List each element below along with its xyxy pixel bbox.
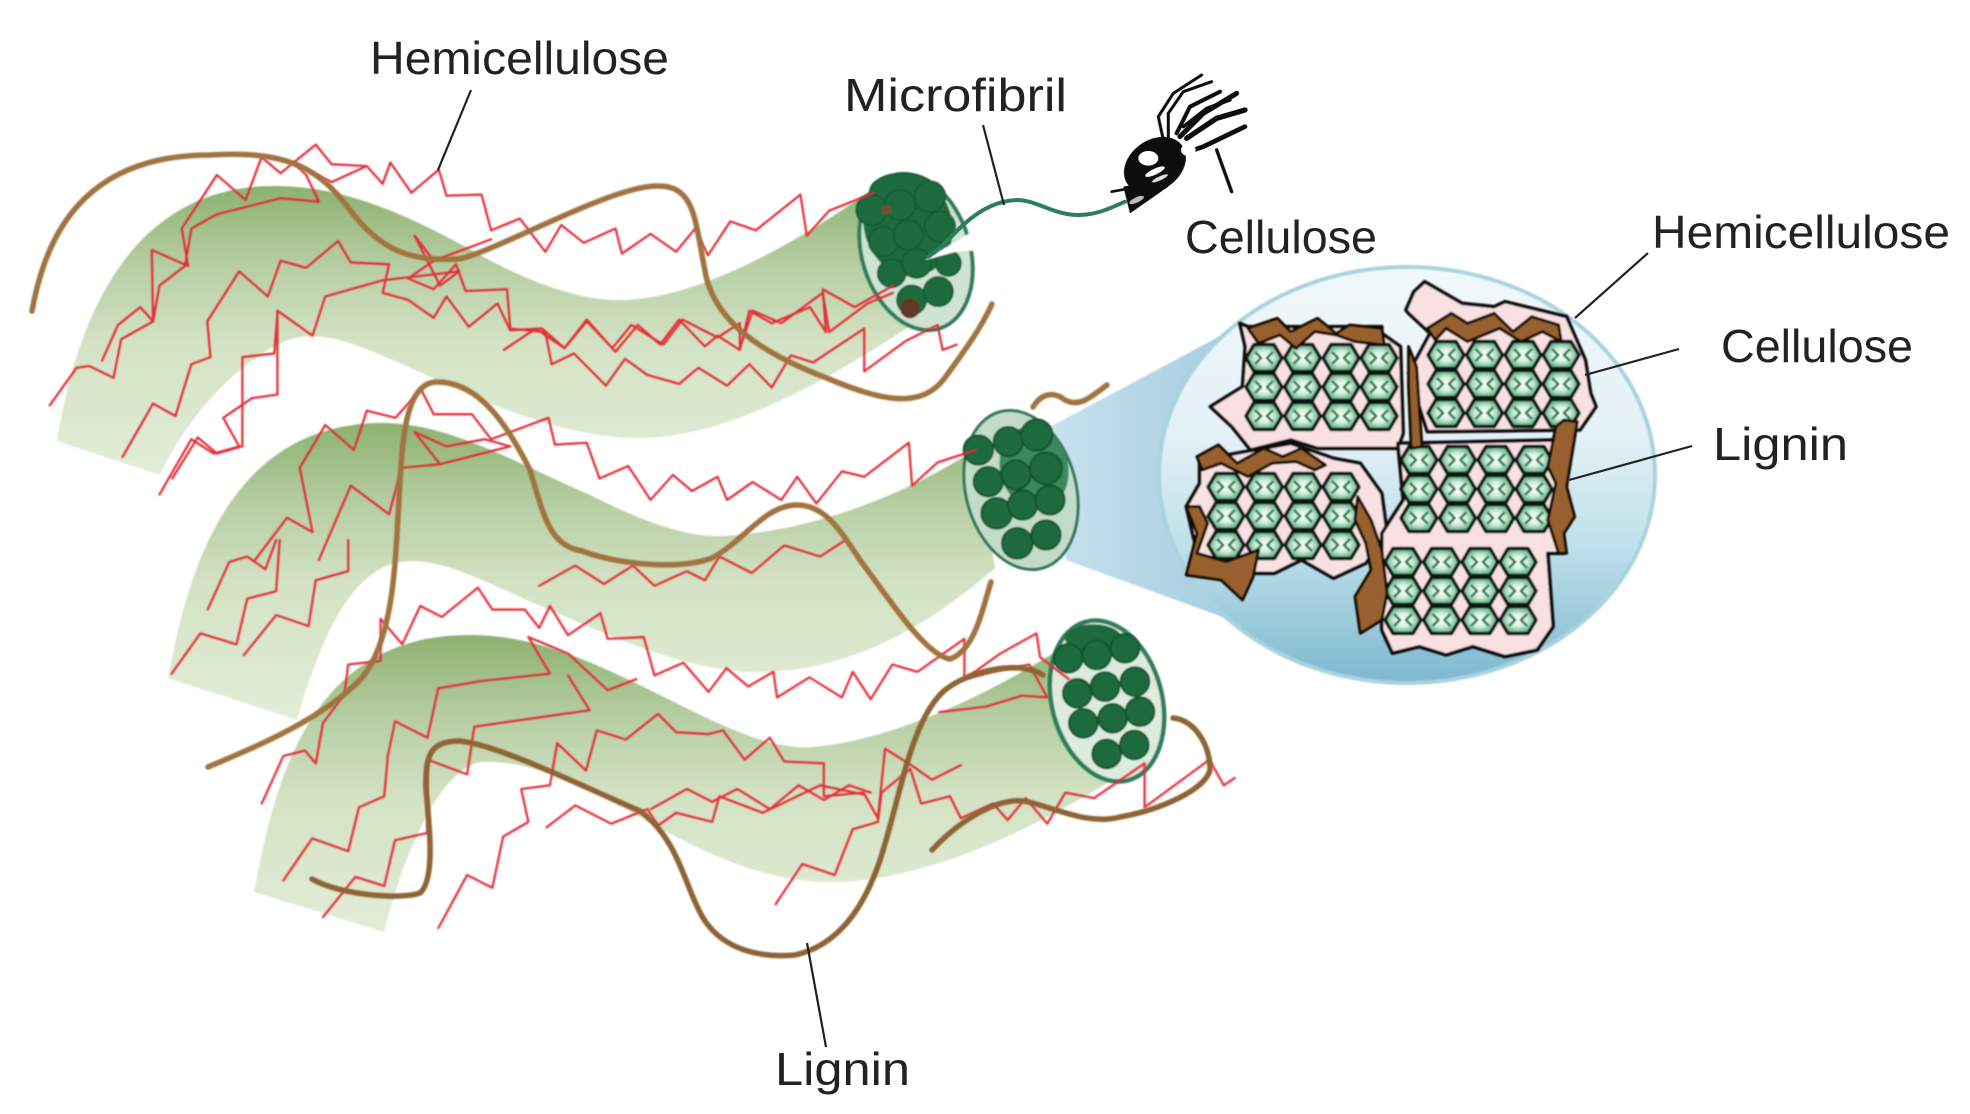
cross section: cellulose blocks in lignin and hemicellulose [1186, 282, 1596, 657]
leader: hemicellulose right [1575, 253, 1648, 318]
label: Microfibril: Microfibril [844, 69, 1067, 121]
magnified circle [1159, 267, 1655, 683]
red chains on middle fibre [255, 389, 976, 560]
block A background [1210, 323, 1403, 450]
lignin strand 2 [208, 382, 991, 767]
lignin brown fragments [1186, 313, 1577, 633]
cellulose hexagons, block B [1428, 342, 1579, 426]
fibre ribbon 2 [168, 423, 995, 720]
lignin strand 1 [32, 154, 992, 399]
icon: cellulose fibre bundle [1112, 75, 1245, 213]
lignin strand 3 [312, 668, 1043, 956]
lignin strand 5 [1033, 385, 1107, 407]
label: Cellulose top: Cellulose [1185, 211, 1377, 263]
leader: lignin bottom [807, 943, 826, 1047]
label: Cellulose right: Cellulose [1721, 320, 1913, 372]
fibre ribbon 1 [57, 186, 918, 475]
cellulose hexagons, block D [1401, 446, 1552, 532]
fibre end 1 with microfibril bundle [841, 160, 991, 344]
lignin brown strands [32, 154, 1210, 956]
fibre ribbon 3 [254, 635, 1122, 932]
leader lines [438, 90, 1692, 1047]
label: Hemicellulose right: Hemicellulose [1652, 206, 1950, 258]
label: Lignin bottom: Lignin [775, 1043, 910, 1095]
leader: lignin right [1569, 446, 1692, 480]
microfibril strand [928, 200, 1125, 257]
cellulose hexagons, block C [1208, 474, 1359, 558]
block D and E background [1382, 440, 1564, 657]
fibre end 3 [1033, 608, 1181, 794]
cellulose hexagons, block A [1246, 344, 1397, 430]
label: Lignin right: Lignin [1713, 418, 1848, 470]
cellulose hexagons, block E [1385, 548, 1536, 634]
fibre end 2 [947, 398, 1095, 582]
block B background [1406, 282, 1596, 432]
lignin strand 4 [932, 718, 1210, 850]
red chains on lower fibres [172, 540, 1235, 928]
block C background [1186, 443, 1387, 578]
zoom cone [1048, 327, 1300, 632]
leader: microfibril [983, 125, 1004, 205]
label: Hemicellulose top: Hemicellulose [370, 32, 669, 84]
red chains on top fibre [50, 145, 957, 495]
hemicellulose red chains [50, 145, 1235, 928]
leader: hemicellulose top [438, 90, 471, 170]
ribbons: three cellulose fibres [57, 186, 1122, 932]
leader: cellulose right [1585, 349, 1679, 375]
